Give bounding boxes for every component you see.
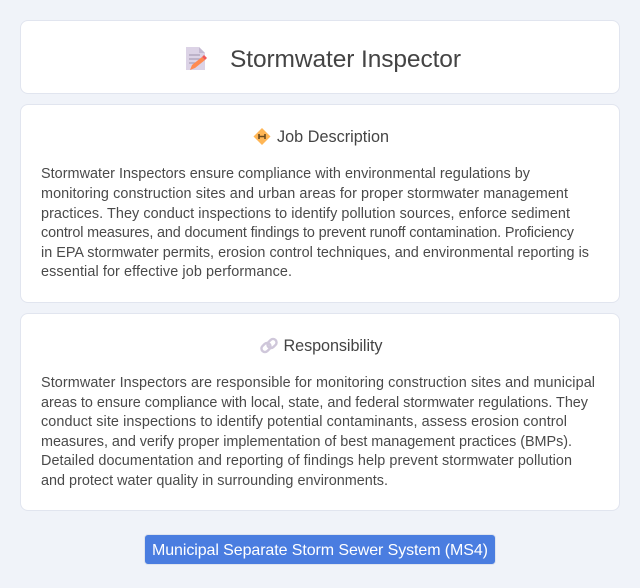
panel: title card [20, 20, 620, 94]
text block: job description: control measures, and document findings to prevent runoff contamination. Proficiency [41, 225, 575, 241]
text block: responsibility: Detailed documentation and reporting of findings help prevent stormwater pollution [41, 453, 572, 469]
icon: document with pencil [186, 47, 207, 70]
text block: responsibility: Stormwater Inspectors are responsible for monitoring construction sites and municipal [41, 375, 595, 391]
text block: responsibility: measures, and verify proper implementation of best management practices (BMPs). [41, 434, 572, 450]
text block: responsibility: and protect water quality in surrounding environments. [41, 473, 388, 489]
text block: responsibility [41, 375, 595, 489]
text block: job description: in EPA stormwater permits, erosion control techniques, and environmental reporting is [41, 245, 589, 261]
heading: job description: Job Description [277, 128, 389, 146]
heading: responsibility: Responsibility [284, 337, 383, 355]
title: Stormwater Inspector [230, 46, 461, 73]
panel: responsibility [20, 313, 620, 511]
text block: job description: practices. They conduct inspections to identify pollution sources, enforce sediment [41, 206, 570, 222]
text block: job description: monitoring construction sites and urban areas for proper stormwater management [41, 186, 568, 202]
text block: job description: essential for effective job performance. [41, 264, 292, 280]
panel: job description [20, 104, 620, 303]
icon: chain link [260, 337, 278, 354]
text block: responsibility: conduct site inspections to identify potential contaminants, assess erosion control [41, 414, 567, 430]
button: MS4 keyword: Municipal Separate Storm Sewer System (MS4) [152, 542, 488, 559]
icon: road sign diamond [254, 128, 270, 145]
button: MS4 keyword [144, 534, 496, 565]
text block: responsibility: areas to ensure compliance with local, state, and federal stormwater regulations. They [41, 395, 589, 411]
text block: job description: Stormwater Inspectors ensure compliance with environmental regulations by [41, 166, 531, 182]
text block: job description [41, 166, 589, 280]
